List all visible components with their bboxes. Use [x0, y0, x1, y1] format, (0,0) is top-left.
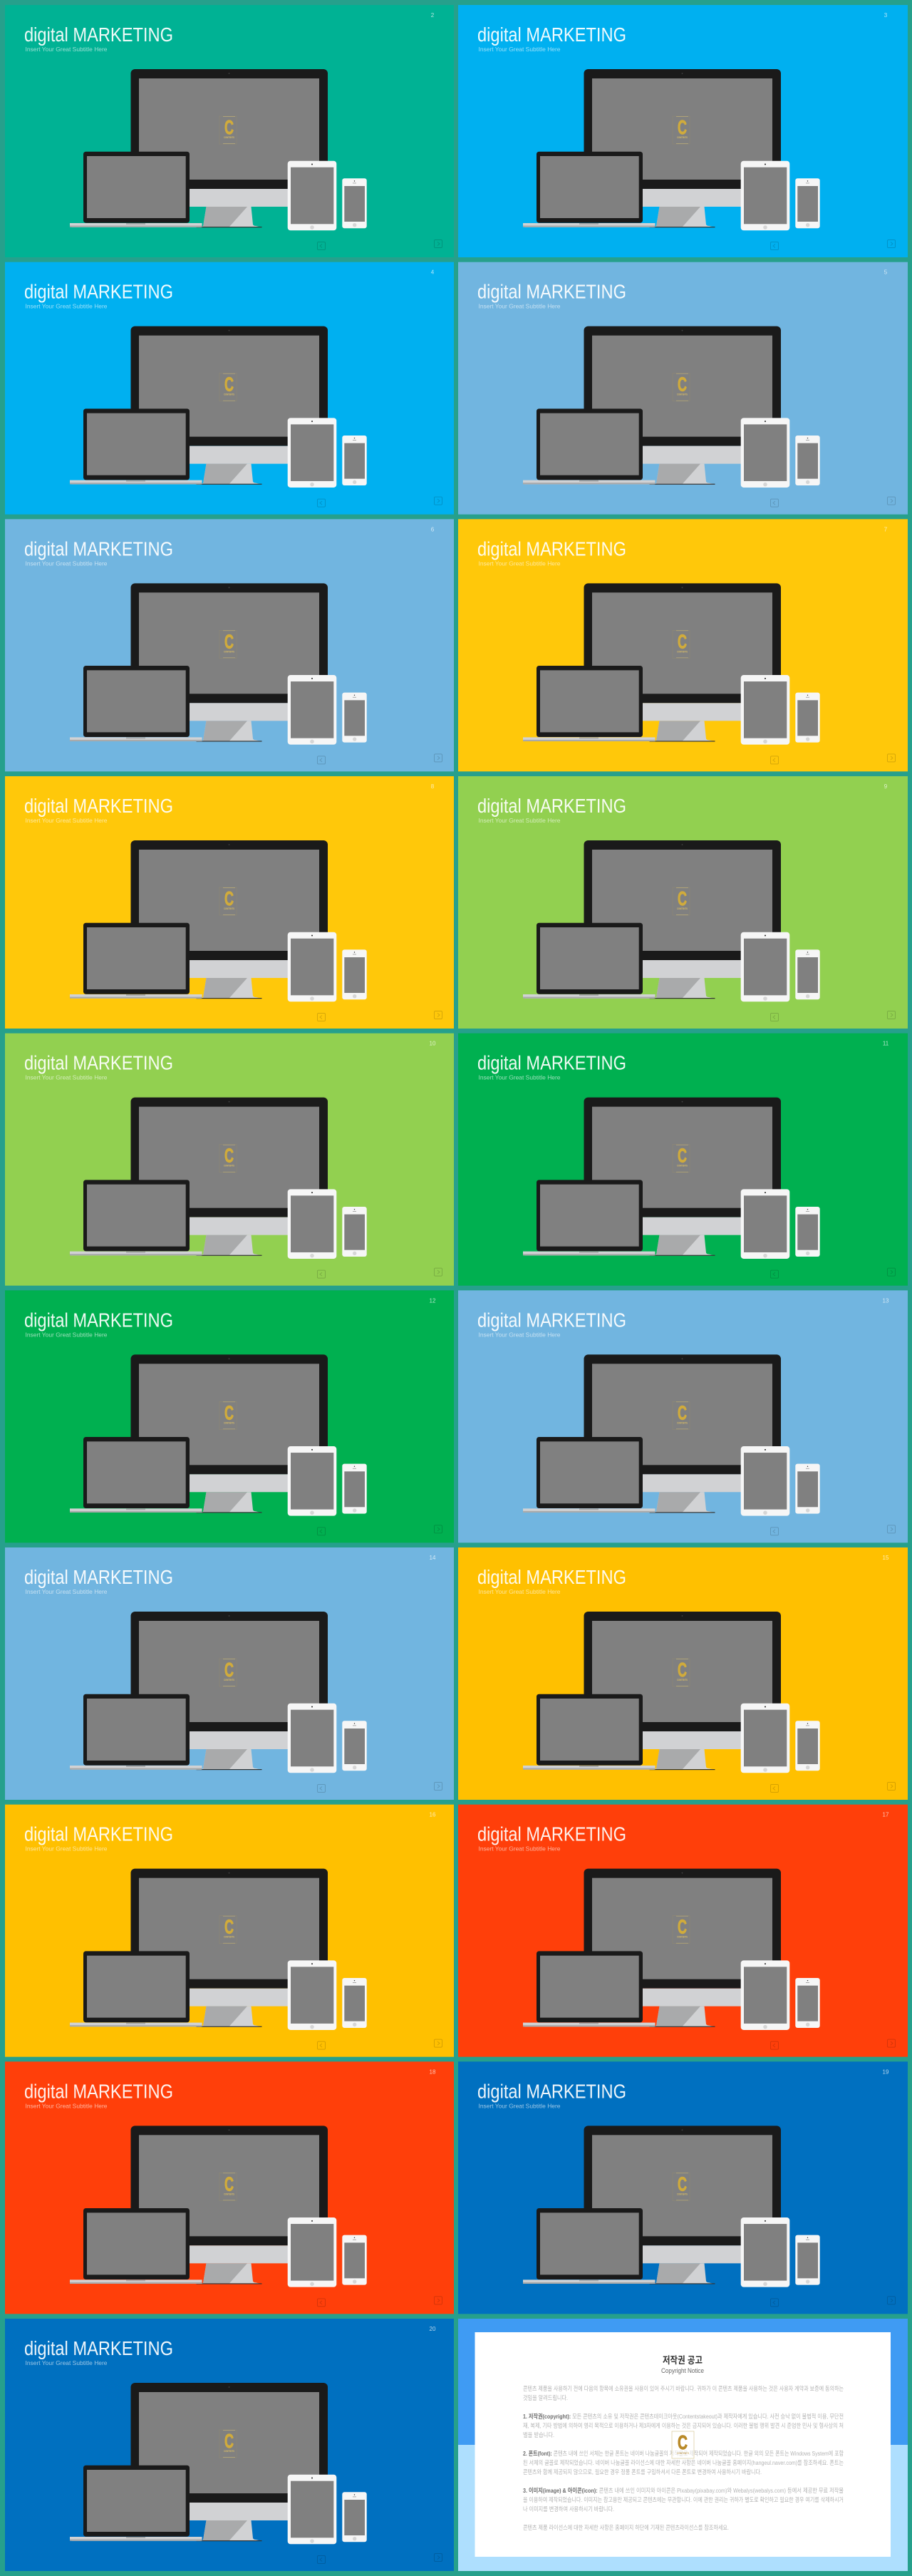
- page number: 10: [430, 1041, 436, 1047]
- page number: 8: [431, 783, 435, 790]
- previous button: [771, 1785, 778, 1792]
- page number: 19: [883, 2068, 889, 2075]
- previous button: [318, 2556, 325, 2563]
- subtitle: Insert Your Great Subtitle Here: [479, 1845, 561, 1853]
- device mockups: [523, 2126, 820, 2287]
- title: digital MARKETING: [477, 24, 626, 46]
- next button: [435, 2297, 442, 2304]
- page number: 18: [430, 2068, 436, 2075]
- slide background: [5, 776, 454, 1029]
- clause 3 image and icon: [523, 2486, 844, 2513]
- next button: [435, 497, 442, 505]
- page number: 2: [431, 12, 435, 19]
- panel: slide 2 teal: [5, 5, 454, 257]
- logo: [224, 1401, 235, 1424]
- slide background: [458, 2061, 908, 2314]
- device mockups: [70, 1098, 367, 1259]
- logo: C: [678, 2173, 687, 2195]
- next button: [888, 497, 895, 505]
- device mockups: [523, 1354, 820, 1516]
- previous button: [318, 1014, 325, 1021]
- logo: CONTENTS: [224, 1165, 235, 1168]
- page number: 6: [431, 526, 435, 532]
- title: digital MARKETING: [24, 795, 173, 817]
- logo: [677, 887, 688, 910]
- device mockups: [523, 69, 820, 230]
- slide background: [458, 5, 908, 257]
- logo: CONTENTS: [677, 1936, 688, 1939]
- next button: [435, 1525, 442, 1533]
- title: digital MARKETING: [477, 795, 626, 817]
- logo: C: [224, 1916, 234, 1938]
- page number: 7: [884, 526, 888, 532]
- logo: [677, 116, 688, 139]
- logo: [224, 116, 235, 139]
- panel: slide 12 green: [5, 1290, 454, 1542]
- logo: CONTENTS: [224, 2450, 235, 2453]
- previous button: [318, 2041, 325, 2049]
- intro text: 콘텐츠 제품을 사용하기 전에 다음의 항목에 소유권을 사용이 있어 주시기 바랍니다. 귀하가 이 콘텐츠 제품을 사용하는 것은 사용자 계약과 보증에 동의하는: [523, 2384, 844, 2392]
- clause 2 font: 콘텐츠와 함께 제공되지 않으므로, 필요한 경우 정품 폰트를 구입하셔서 다른 폰트로 변경하여 사용하시기 바랍니다.: [523, 2468, 762, 2475]
- watermark logo: [672, 2431, 694, 2458]
- previous button: [318, 1270, 325, 1278]
- logo: C: [678, 887, 687, 910]
- logo: C: [678, 373, 687, 396]
- logo: [224, 1916, 235, 1939]
- page number: 12: [430, 1297, 436, 1304]
- logo: C: [224, 373, 234, 396]
- logo: CONTENTS: [677, 1421, 688, 1424]
- logo: [224, 1659, 235, 1681]
- device mockups: [523, 326, 820, 488]
- logo: CONTENTS: [224, 393, 235, 396]
- notice heading: 저작권 공고: [663, 2355, 703, 2366]
- panel: slide 18 orange red: [5, 2061, 454, 2314]
- logo: CONTENTS: [677, 2193, 688, 2195]
- next button: [435, 1782, 442, 1791]
- subtitle: Insert Your Great Subtitle Here: [479, 2102, 561, 2109]
- title: digital MARKETING: [477, 1823, 626, 1845]
- title: digital MARKETING: [477, 2080, 626, 2102]
- subtitle: Insert Your Great Subtitle Here: [26, 817, 108, 824]
- page number: 9: [884, 783, 888, 790]
- subtitle: Insert Your Great Subtitle Here: [479, 1074, 561, 1081]
- title: digital MARKETING: [24, 1309, 173, 1331]
- logo: [677, 630, 688, 653]
- subtitle: Insert Your Great Subtitle Here: [479, 303, 561, 310]
- previous button: [771, 499, 778, 507]
- device mockups: [70, 2383, 367, 2544]
- previous button: [318, 1785, 325, 1792]
- slide background: [5, 2061, 454, 2314]
- clause 1 copyright: 벌을 받습니다.: [523, 2431, 554, 2438]
- page number: 11: [883, 1041, 889, 1047]
- panel: slide 3 sky blue: [458, 5, 908, 257]
- device mockups: [523, 1098, 820, 1259]
- next button: [888, 1782, 895, 1791]
- intro text: 것임을 알려드립니다.: [523, 2394, 568, 2401]
- device mockups: [523, 840, 820, 1001]
- slide background: [5, 519, 454, 771]
- panel: slide 11 green: [458, 1034, 908, 1286]
- logo: [677, 1659, 688, 1681]
- logo: CONTENTS: [677, 136, 688, 139]
- page number: 17: [883, 1812, 889, 1818]
- next button: [888, 1268, 895, 1276]
- previous button: [318, 756, 325, 764]
- device mockups: [70, 1612, 367, 1773]
- subtitle: Insert Your Great Subtitle Here: [26, 560, 108, 567]
- subtitle: Insert Your Great Subtitle Here: [479, 560, 561, 567]
- logo: CONTENTS: [224, 136, 235, 139]
- panel: slide 16 amber: [5, 1805, 454, 2057]
- next button: [435, 2553, 442, 2562]
- subtitle: Insert Your Great Subtitle Here: [26, 1845, 108, 1853]
- subtitle: Insert Your Great Subtitle Here: [26, 2359, 108, 2366]
- device mockups: [70, 2126, 367, 2287]
- previous button: [771, 2041, 778, 2049]
- slide background: [458, 1290, 908, 1542]
- logo: CONTENTS: [224, 1679, 235, 1681]
- white notice card: [475, 2332, 891, 2557]
- title: digital MARKETING: [477, 281, 626, 303]
- panel: slide 9 lime green: [458, 776, 908, 1029]
- logo: [224, 887, 235, 910]
- panel: slide 15 amber: [458, 1547, 908, 1800]
- page number: 16: [430, 1812, 436, 1818]
- title: digital MARKETING: [24, 281, 173, 303]
- logo: [224, 630, 235, 653]
- slide background: [458, 1805, 908, 2057]
- watermark logo: CONTENTS: [677, 2451, 689, 2455]
- next button: [888, 239, 895, 248]
- slide background: [5, 1805, 454, 2057]
- logo: CONTENTS: [677, 907, 688, 910]
- subtitle: Insert Your Great Subtitle Here: [479, 1331, 561, 1338]
- device mockups: [70, 840, 367, 1001]
- title: digital MARKETING: [477, 1052, 626, 1074]
- slide background: [5, 1034, 454, 1286]
- device mockups: [70, 583, 367, 745]
- panel: slide 14 light blue: [5, 1547, 454, 1800]
- title: digital MARKETING: [24, 24, 173, 46]
- device mockups: [70, 1354, 367, 1516]
- notice subheading: Copyright Notice: [661, 2367, 704, 2374]
- page number: 3: [884, 12, 888, 19]
- logo: CONTENTS: [677, 1679, 688, 1681]
- logo: CONTENTS: [224, 650, 235, 653]
- subtitle: Insert Your Great Subtitle Here: [479, 46, 561, 53]
- slide background: [458, 776, 908, 1029]
- previous button: [771, 756, 778, 764]
- subtitle: Insert Your Great Subtitle Here: [26, 1588, 108, 1595]
- logo: C: [224, 116, 234, 138]
- panel: slide 8 yellow: [5, 776, 454, 1029]
- logo: CONTENTS: [224, 1936, 235, 1939]
- previous button: [318, 1527, 325, 1535]
- panel: slide 6 light blue: [5, 519, 454, 771]
- next button: [435, 1011, 442, 1019]
- logo: [224, 1145, 235, 1168]
- next button: [435, 239, 442, 248]
- title: digital MARKETING: [24, 1823, 173, 1845]
- page number: 14: [430, 1555, 436, 1561]
- logo: C: [678, 1916, 687, 1938]
- previous button: [318, 2299, 325, 2307]
- previous button: [771, 1270, 778, 1278]
- logo: C: [678, 1145, 687, 1167]
- logo: CONTENTS: [677, 650, 688, 653]
- logo: C: [224, 630, 234, 652]
- slide background: [458, 262, 908, 515]
- next button: [435, 2039, 442, 2047]
- previous button: [771, 1014, 778, 1021]
- panel: slide 5 light blue: [458, 262, 908, 515]
- lower pale blue background: [458, 2445, 908, 2571]
- panel: slide 7 yellow: [458, 519, 908, 771]
- device mockups: [70, 326, 367, 488]
- clause 2 font: [523, 2449, 844, 2475]
- panel: slide 19 blue: [458, 2061, 908, 2314]
- slide background: [458, 519, 908, 771]
- slide background: [5, 2319, 454, 2571]
- title: digital MARKETING: [24, 1052, 173, 1074]
- panel: slide 4 sky blue: [5, 262, 454, 515]
- slide background: [5, 262, 454, 515]
- closing license note: 콘텐츠 제품 라이선스에 대한 자세한 사항은 홈페이지 하단에 기재된 콘텐츠라이선스를 참조하세요.: [523, 2523, 729, 2531]
- panel: copyright notice: [458, 2319, 908, 2571]
- panel: slide 20 blue: [5, 2319, 454, 2571]
- upper blue background: [458, 2319, 908, 2445]
- logo: C: [678, 1659, 687, 1681]
- logo: C: [224, 2430, 234, 2452]
- logo: C: [224, 2173, 234, 2195]
- previous button: [771, 2299, 778, 2307]
- next button: [435, 754, 442, 762]
- clause 3 image and icon: 을 이용하여 제작되었습니다. 이미지는 참고용만 제공되고 콘텐츠에는 무관합니다. 이에 관한 권리는 귀하가 별도로 확인하고 필요한 경우 여기를 삭제하시거: [523, 2495, 844, 2503]
- next button: [888, 2039, 895, 2047]
- logo: [677, 2173, 688, 2195]
- title: digital MARKETING: [24, 2080, 173, 2102]
- title: digital MARKETING: [24, 2337, 173, 2359]
- page number: 4: [431, 269, 435, 276]
- clause 2 font: 된 서체의 글꼴로 제작되었습니다. 네이버 나눔글꼴 라이선스에 대한 자세한 사항은 네이버 나눔글꼴 홈페이지(hangeul.naver.com)를 참조하세요. 폰트는: [523, 2458, 844, 2466]
- previous button: [771, 1527, 778, 1535]
- next button: [888, 754, 895, 762]
- device mockups: [523, 1869, 820, 2030]
- title: digital MARKETING: [477, 537, 626, 560]
- next button: [435, 1268, 442, 1276]
- device mockups: [523, 583, 820, 745]
- subtitle: Insert Your Great Subtitle Here: [479, 1588, 561, 1595]
- slide background: [5, 1290, 454, 1542]
- clause 1 copyright: [523, 2412, 844, 2438]
- logo: [677, 1916, 688, 1939]
- clause 1 copyright: 재, 복제, 기타 방법에 의하여 영리 목적으로 이용하거나 제3자에게 이용하는 것은 금지되어 있습니다. 이러한 불법 행위 발견 시 준엄한 민사 및 형사상의 처: [523, 2421, 844, 2429]
- title: digital MARKETING: [24, 1566, 173, 1588]
- logo: C: [678, 116, 687, 138]
- subtitle: Insert Your Great Subtitle Here: [26, 1331, 108, 1338]
- page number: 5: [884, 269, 888, 276]
- previous button: [318, 242, 325, 249]
- logo: [224, 373, 235, 396]
- page number: 15: [883, 1555, 889, 1561]
- page number: 20: [430, 2326, 436, 2332]
- logo: [677, 373, 688, 396]
- device mockups: [523, 1612, 820, 1773]
- logo: [677, 1401, 688, 1424]
- next button: [888, 1525, 895, 1533]
- title: digital MARKETING: [24, 537, 173, 560]
- device mockups: [70, 1869, 367, 2030]
- panel: slide 13 light blue: [458, 1290, 908, 1542]
- logo: C: [224, 1659, 234, 1681]
- logo: CONTENTS: [677, 393, 688, 396]
- clause 3 image and icon: 3. 이미지(image) & 아이콘(icon): 콘텐츠 내에 쓰인 이미지와 아이콘은 Pixabay(pixabay.com)와 Webalys(webalys.com) 등에서 제공한 무료 저작물: [523, 2486, 844, 2494]
- clause 3 image and icon: 나 이미지를 변경하여 사용하시기 바랍니다.: [523, 2505, 614, 2513]
- logo: C: [224, 1145, 234, 1167]
- intro text: [523, 2384, 844, 2401]
- page number: 13: [883, 1297, 889, 1304]
- previous button: [771, 242, 778, 249]
- logo: CONTENTS: [224, 2193, 235, 2195]
- logo: C: [224, 887, 234, 910]
- subtitle: Insert Your Great Subtitle Here: [26, 303, 108, 310]
- device mockups: [70, 69, 367, 230]
- logo: CONTENTS: [224, 1421, 235, 1424]
- title: digital MARKETING: [477, 1566, 626, 1588]
- subtitle: Insert Your Great Subtitle Here: [26, 2102, 108, 2109]
- next button: [888, 1011, 895, 1019]
- subtitle: Insert Your Great Subtitle Here: [479, 817, 561, 824]
- title: digital MARKETING: [477, 1309, 626, 1331]
- clause 2 font: 2. 폰트(font): 콘텐츠 내에 쓰인 서체는 한글 폰트는 네이버 나눔글꼴의 저작물로 제작되어 제작되었습니다. 한글 외의 모든 폰트는 Windows System에 포함: [523, 2449, 844, 2457]
- subtitle: Insert Your Great Subtitle Here: [26, 46, 108, 53]
- logo: CONTENTS: [224, 907, 235, 910]
- slide background: [458, 1547, 908, 1800]
- panel: slide 10 lime green: [5, 1034, 454, 1286]
- logo: CONTENTS: [677, 1165, 688, 1168]
- logo: [224, 2430, 235, 2453]
- logo: [677, 1145, 688, 1168]
- logo: [224, 2173, 235, 2195]
- watermark logo: C: [678, 2431, 688, 2453]
- logo: C: [678, 1401, 687, 1423]
- clause 1 copyright: 1. 저작권(copyright): 모든 콘텐츠의 소유 및 저작권은 콘텐츠테이크아웃(Contentstakeout)과 제작자에게 있습니다. 사전 승낙 없이 불법적 이용, 무단전: [523, 2412, 844, 2420]
- logo: C: [224, 1401, 234, 1423]
- panel: slide 17 orange red: [458, 1805, 908, 2057]
- slide background: [5, 5, 454, 257]
- previous button: [318, 499, 325, 507]
- slide background: [458, 1034, 908, 1286]
- slide background: [5, 1547, 454, 1800]
- logo: C: [678, 630, 687, 652]
- subtitle: Insert Your Great Subtitle Here: [26, 1074, 108, 1081]
- next button: [888, 2297, 895, 2304]
